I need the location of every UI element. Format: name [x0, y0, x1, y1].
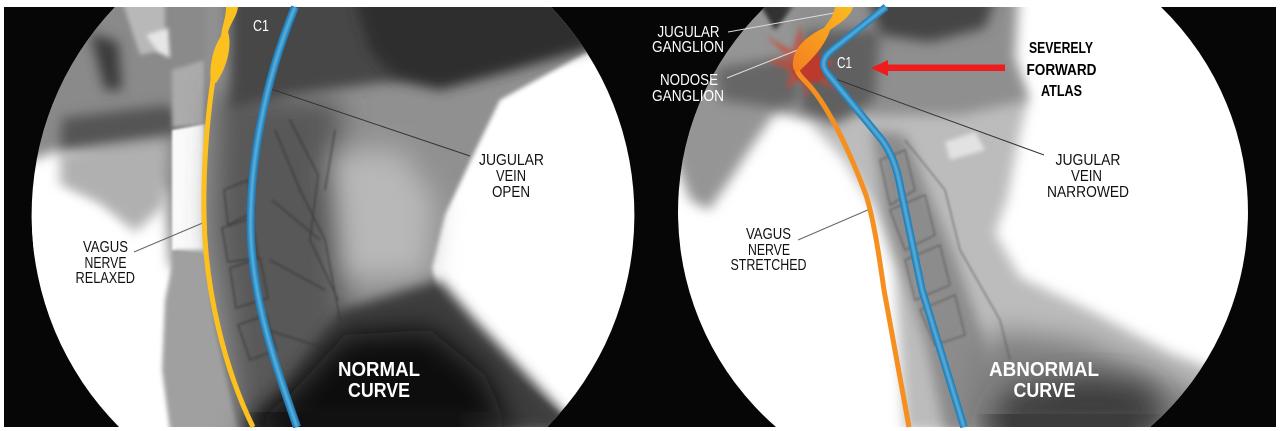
label: vagus nerve stretched: VAGUS: [746, 226, 791, 243]
inflammation glow: [765, 25, 838, 98]
label: jugular vein open: OPEN: [492, 184, 530, 201]
x-ray: neck column: [205, 0, 600, 431]
connector: vagus nerve relaxed: [134, 222, 205, 252]
heading: normal curve: CURVE: [348, 380, 410, 402]
jugular vein: [251, 7, 297, 427]
x-ray: cervical vertebrae: [880, 140, 1010, 360]
label: severely forward atlas: SEVERELY: [1029, 40, 1093, 57]
label: vagus nerve relaxed: NERVE: [84, 255, 126, 272]
label: jugular vein narrowed: VEIN: [1071, 168, 1102, 185]
x-ray: neck column: [790, 0, 1215, 431]
panel: abnormal curve: [640, 0, 1276, 431]
x-ray: shoulder shadow: [960, 330, 1215, 431]
label: severely forward atlas: ATLAS: [1041, 83, 1082, 100]
x-ray: lower front neck tissue: [162, 250, 238, 431]
connector: vagus nerve stretched: [798, 209, 870, 240]
x-ray: skull base shadow: [860, 0, 1005, 42]
panel: normal curve: [0, 0, 640, 431]
arrow: forward atlas: [871, 60, 1005, 76]
label: jugular vein narrowed: [1047, 152, 1129, 201]
heading: normal curve: [338, 359, 420, 402]
connector: jugular vein open: [265, 87, 470, 156]
label: nodose ganglion: NODOSE: [660, 72, 718, 89]
label: C1: C1: [253, 18, 269, 35]
label: jugular ganglion: GANGLION: [652, 39, 724, 56]
label: vagus nerve relaxed: [76, 239, 135, 287]
connector: jugular ganglion: [728, 13, 834, 32]
label: jugular vein narrowed: NARROWED: [1047, 184, 1129, 201]
label: jugular ganglion: JUGULAR: [658, 24, 720, 41]
label: C1: C1: [837, 55, 852, 72]
label: nodose ganglion: [652, 72, 724, 105]
label: vagus nerve relaxed: RELAXED: [76, 270, 135, 287]
label: vagus nerve stretched: NERVE: [748, 242, 790, 259]
x-ray: head and jaw soft tissue: [679, 7, 810, 216]
label: jugular ganglion: [652, 24, 724, 56]
x-ray: skull base shadow: [345, 0, 610, 90]
label: jugular vein narrowed: JUGULAR: [1056, 152, 1120, 169]
label: nodose ganglion: GANGLION: [652, 88, 724, 105]
label: vagus nerve relaxed: VAGUS: [83, 239, 128, 256]
vagus nerve: [793, 7, 909, 427]
label: severely forward atlas: [1026, 40, 1096, 100]
connector: nodose ganglion: [727, 49, 800, 78]
heading: normal curve: NORMAL: [338, 359, 420, 381]
heading: abnormal curve: ABNORMAL: [989, 359, 1099, 381]
vagus nerve: [204, 7, 253, 427]
heading: abnormal curve: [989, 359, 1099, 402]
label: severely forward atlas: FORWARD: [1026, 62, 1096, 79]
label: jugular vein open: VEIN: [496, 168, 526, 185]
label: vagus nerve stretched: STRETCHED: [730, 257, 806, 274]
x-ray: cervical vertebrae: [222, 120, 340, 360]
label: jugular vein open: [479, 152, 544, 201]
jugular vein: [823, 7, 964, 427]
label: vagus nerve stretched: [730, 226, 806, 274]
label: jugular vein open: JUGULAR: [479, 152, 544, 169]
x-ray: shoulder shadow: [240, 280, 580, 431]
x-ray: head and jaw soft tissue: [32, 7, 208, 273]
heading: abnormal curve: CURVE: [1014, 380, 1076, 402]
connector: jugular vein narrowed: [830, 77, 1044, 155]
